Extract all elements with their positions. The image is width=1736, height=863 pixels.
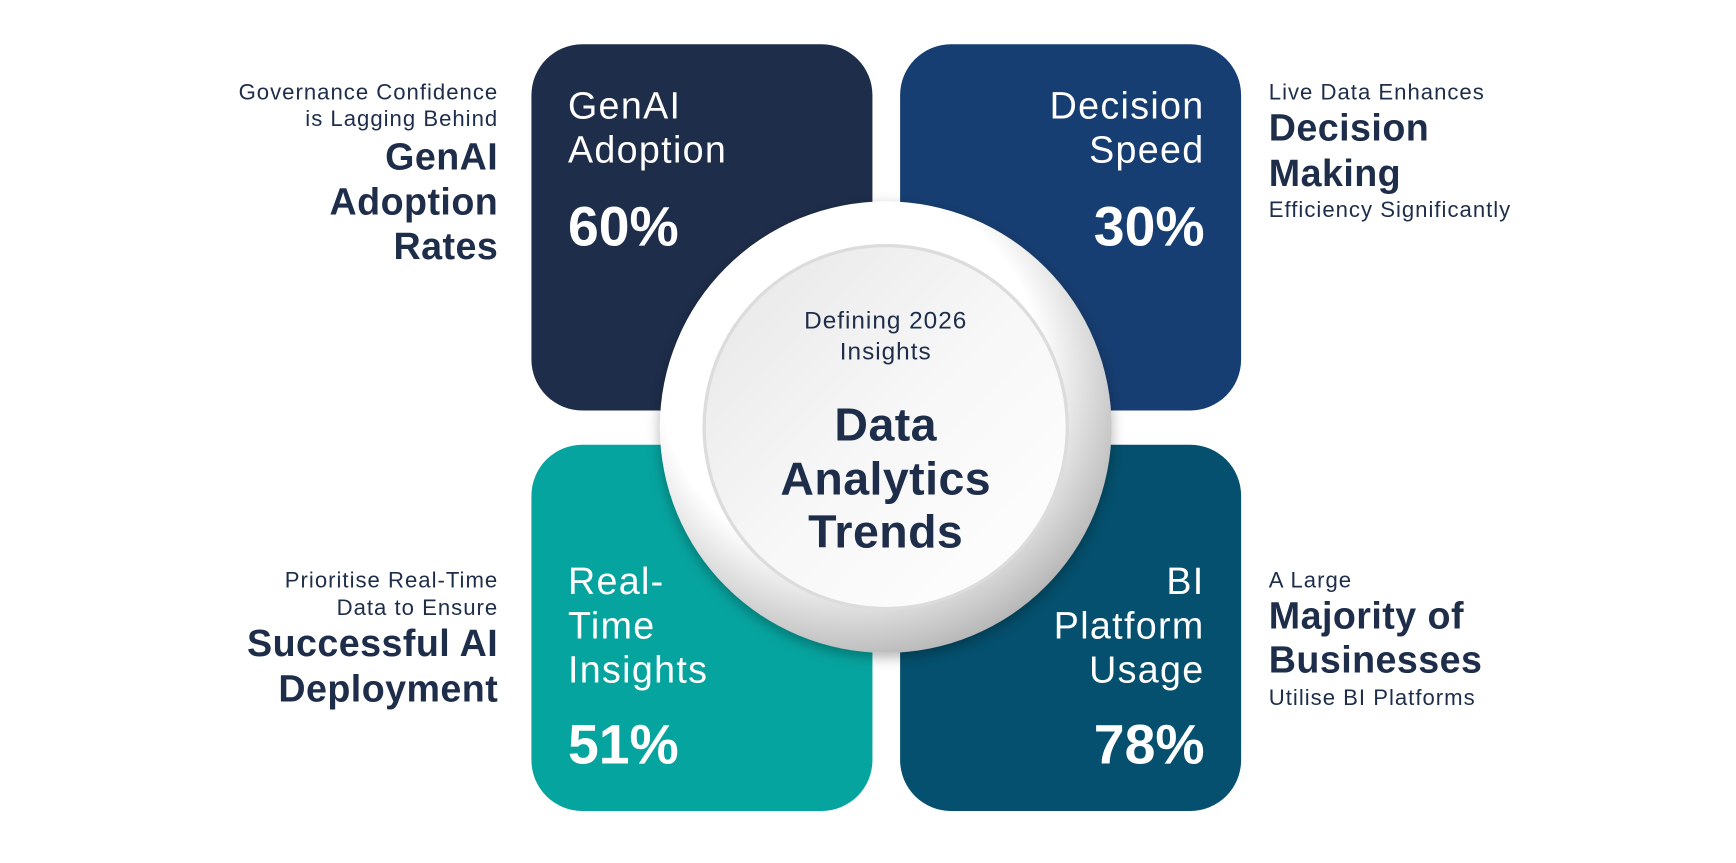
text block: Decision Making: Live Data Enhances	[1269, 80, 1485, 105]
panel: GenAI Adoption	[531, 44, 872, 410]
panel: Decision Speed: Decision	[1050, 84, 1205, 126]
panel: Decision Speed: Speed	[1089, 129, 1205, 171]
panel: BI Platform Usage: BI	[1166, 560, 1205, 602]
text block: Majority of Businesses: Majority of	[1269, 594, 1464, 636]
center circle: Trends	[808, 506, 963, 558]
center circle: Insights	[840, 339, 932, 366]
panel: GenAI Adoption: 60%	[568, 196, 679, 258]
text block: GenAI Adoption Rates: Rates	[393, 225, 498, 267]
text block: Successful AI Deployment	[247, 568, 498, 709]
panel: Real-Time Insights: 51%	[568, 713, 679, 775]
panel: BI Platform Usage: Platform	[1054, 604, 1205, 646]
center circle: Analytics	[780, 453, 991, 505]
text block: GenAI Adoption Rates: is Lagging Behind	[305, 106, 498, 131]
panel: Decision Speed	[900, 44, 1241, 410]
panel: GenAI Adoption: Adoption	[568, 129, 727, 171]
text block: Successful AI Deployment: Successful AI	[247, 622, 498, 664]
text block: Decision Making: Making	[1269, 152, 1401, 194]
panel: Real-Time Insights: Real-	[568, 560, 665, 602]
text block: GenAI Adoption Rates: GenAI	[385, 135, 498, 177]
text block: Successful AI Deployment: Data to Ensure	[337, 595, 498, 620]
center circle	[660, 201, 1112, 653]
panel: Real-Time Insights: Time	[568, 604, 656, 646]
text block: Decision Making: Decision	[1269, 107, 1429, 149]
text block: Decision Making: Efficiency Significantly	[1269, 197, 1511, 222]
panel: Real-Time Insights: Insights	[568, 649, 708, 691]
text block: Decision Making	[1269, 80, 1511, 222]
text block: GenAI Adoption Rates: Adoption	[330, 181, 498, 223]
panel: Decision Speed: 30%	[1094, 196, 1205, 258]
panel: BI Platform Usage: Usage	[1089, 649, 1205, 691]
panel: GenAI Adoption: GenAI	[568, 84, 681, 126]
text block: GenAI Adoption Rates: Governance Confidence	[239, 80, 498, 105]
center circle: Defining 2026	[804, 308, 967, 335]
text block: Successful AI Deployment: Prioritise Real-Time	[285, 568, 498, 593]
text block: Successful AI Deployment: Deployment	[278, 667, 498, 709]
panel: BI Platform Usage	[900, 445, 1241, 811]
text block: Majority of Businesses: Businesses	[1269, 639, 1482, 681]
panel: BI Platform Usage: 78%	[1094, 713, 1205, 775]
text block: Majority of Businesses	[1269, 568, 1482, 710]
panel: Real-Time Insights	[531, 445, 872, 811]
center circle: Data	[834, 398, 938, 450]
text block: GenAI Adoption Rates	[239, 80, 498, 267]
text block: Majority of Businesses: A Large	[1269, 568, 1352, 593]
text block: Majority of Businesses: Utilise BI Platforms	[1269, 685, 1476, 710]
